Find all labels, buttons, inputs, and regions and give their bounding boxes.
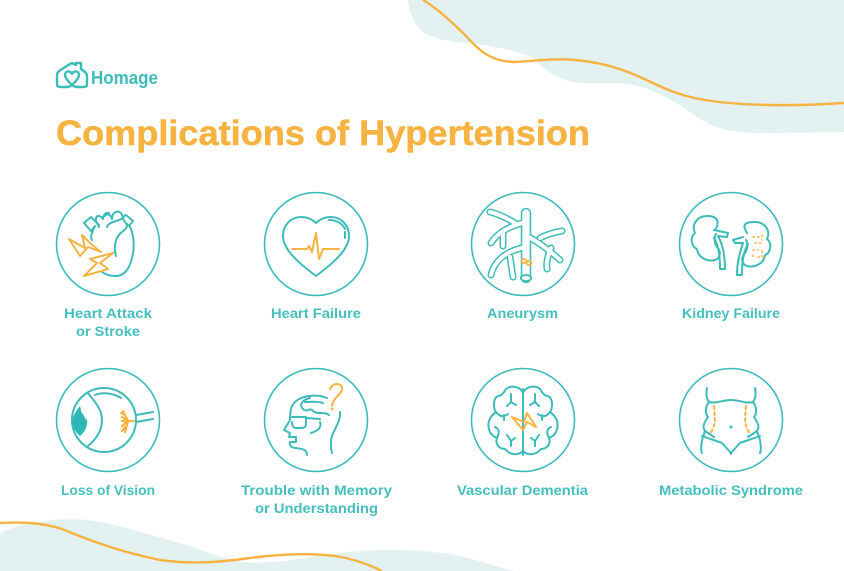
icon: right kidney [733,222,770,275]
icon: lightning bolt [512,413,536,430]
icon ring [472,368,574,472]
icon: pulse line [292,233,339,259]
icon: retina vessels [121,411,134,432]
decorative wave line: top [423,0,844,105]
label [241,482,392,516]
icon ring [680,192,782,296]
background blob: top right [408,0,844,133]
decorative wave line: bottom [0,523,382,571]
icon: anatomical heart [84,211,134,276]
logo: Homage [57,63,158,88]
background blob: bottom left [0,519,515,571]
panel: heart failure [264,192,368,321]
label: Heart Attack [64,305,152,321]
icon: lightning bolts [69,235,113,276]
icon ring [264,192,368,296]
panel: metabolic syndrome [659,368,803,498]
panel: heart attack or stroke [56,192,160,339]
label: or Understanding [255,500,378,516]
panel: kidney failure [680,192,782,321]
icon: branching blood vessels [490,212,562,281]
panel: aneurysm [472,192,574,321]
label [64,305,152,339]
title: Complications of Hypertension [56,114,590,153]
panel: vascular dementia [457,368,588,498]
icon: aneurysm bulge [522,259,532,265]
icon ring [264,368,368,472]
label: Heart Failure [271,305,361,321]
label: Loss of Vision [61,482,155,498]
icon: question mark [330,384,342,410]
icon ring [56,368,160,472]
icon: left kidney [692,216,728,269]
label: Trouble with Memory [241,482,392,498]
icon ring [56,192,160,296]
icon: brain [488,387,558,455]
panel: loss of vision [56,368,160,498]
panel: trouble with memory [241,368,392,516]
icon: lens [72,406,87,436]
label: Metabolic Syndrome [659,482,803,498]
icon: torso [701,388,761,454]
label: Aneurysm [487,305,558,321]
icon: heart [283,217,349,276]
icon: house with heart [57,63,87,87]
icon: head profile [284,396,340,455]
icon ring [472,192,574,296]
icon: kidney damage dots [753,235,764,259]
icon ring [680,368,782,472]
icon: dashed fat lines [711,406,749,432]
label: Vascular Dementia [457,482,588,498]
logo wordmark: Homage [91,68,158,88]
icon: eyeball [72,388,153,452]
label: or Stroke [76,323,140,339]
label: Kidney Failure [682,305,780,321]
